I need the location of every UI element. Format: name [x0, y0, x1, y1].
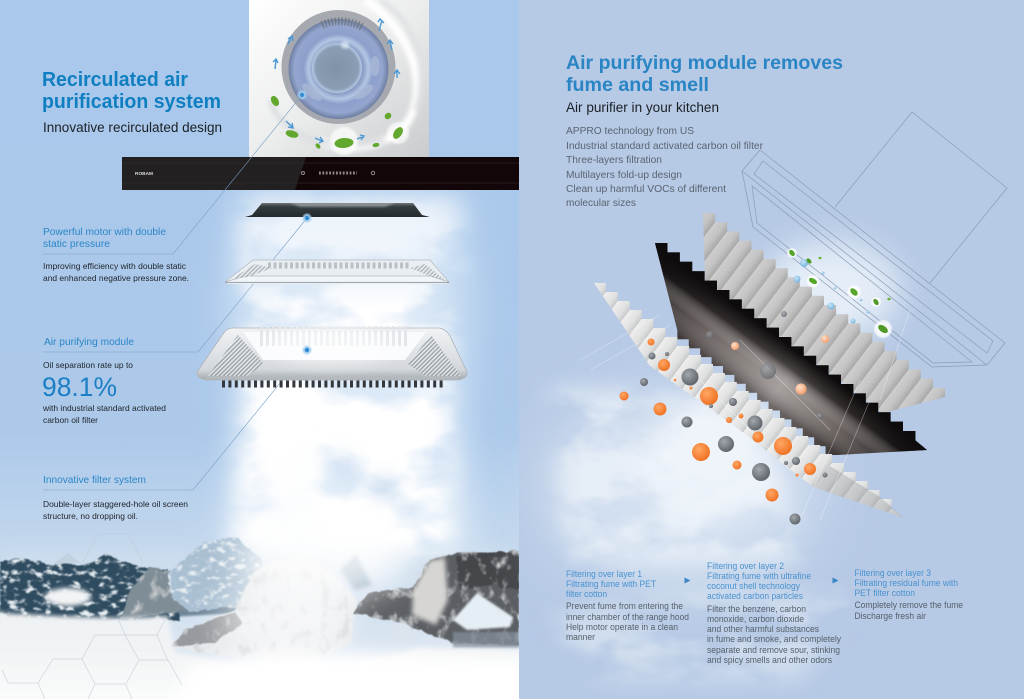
text block: powerful motor — [43, 226, 189, 283]
text block: layer 2: activated carbon particles — [707, 591, 803, 601]
steam column — [215, 190, 480, 562]
marker dot — [302, 213, 312, 223]
glow clouds — [540, 242, 900, 680]
text block: powerful motor: Powerful motor with double — [43, 226, 166, 238]
text block: layer 2: coconut shell technology — [707, 581, 800, 591]
heading — [42, 69, 221, 113]
right rocks — [353, 550, 519, 645]
mountain backdrop — [0, 545, 262, 620]
oil filter screen — [225, 260, 449, 284]
distant peak — [52, 553, 81, 565]
feature list: APPRO technology from US — [566, 125, 694, 137]
text block: layer 2: Filtrating fume with ultrafine — [707, 571, 811, 581]
text block: layer 1: manner — [566, 632, 595, 642]
feature list: Clean up harmful VOCs of different — [566, 183, 726, 195]
text block: air purifying module — [42, 336, 166, 425]
text block: innovative filter: Double-layer staggered-hole oil screen — [43, 499, 188, 509]
text block: innovative filter — [43, 474, 188, 521]
central white mountain — [170, 553, 357, 665]
fan wheel — [282, 10, 396, 124]
cloud sea — [0, 612, 540, 699]
heading: purification system — [42, 91, 221, 113]
motor unit — [245, 203, 430, 223]
fog over tray — [268, 325, 392, 365]
arrow: layer 2 to 3 — [832, 578, 838, 584]
text block: air purifying module: with industrial standard activated — [42, 403, 166, 413]
text block: layer 1 — [566, 569, 689, 642]
hood control bar — [122, 157, 519, 190]
heading: Recirculated air — [42, 69, 188, 91]
text block: layer 1: Filtrating fume with PET — [566, 579, 656, 589]
brand: ROBAM — [135, 171, 153, 176]
text block: powerful motor: Improving efficiency with double static — [43, 261, 187, 271]
text block: layer 3: PET filter cotton — [854, 588, 915, 598]
filter layer 2: carbon layer — [655, 243, 927, 455]
green leaves — [786, 248, 893, 339]
feature list: Three-layers filtration — [566, 154, 662, 166]
text block: layer 2: and other harmful substances — [707, 624, 819, 634]
mountain landscape — [0, 522, 540, 699]
heading — [566, 52, 843, 96]
text block: layer 1: Prevent fume from entering the — [566, 601, 683, 611]
text block: layer 1: filter cotton — [566, 589, 607, 599]
filter layer 3: grey pleats — [703, 213, 945, 413]
heading: Air purifying module removes — [566, 52, 843, 74]
grey rock slab — [120, 568, 190, 620]
hexagon outlines — [2, 534, 182, 699]
text block: innovative filter: Innovative filter system — [43, 474, 146, 486]
orange particles — [620, 335, 829, 502]
airflow arrows — [273, 19, 400, 143]
leader lines — [43, 95, 307, 490]
text block: layer 3: Filtrating residual fume with — [854, 578, 958, 588]
text block: layer 3 — [854, 568, 963, 621]
text block: air purifying module: Oil separation rate up to — [43, 360, 133, 370]
text block: layer 2: Filter the benzene, carbon — [707, 604, 806, 614]
text block: layer 3: Filtering over layer 3 — [854, 568, 931, 578]
panel: left recirculated system — [0, 0, 540, 699]
text block: powerful motor: and enhanced negative pressure zone. — [43, 273, 189, 283]
text block: layer 1: inner chamber of the range hood — [566, 612, 689, 622]
feature list: Multilayers fold-up design — [566, 169, 682, 181]
text block: layer 2: in fume and smoke, and completely — [707, 634, 841, 644]
touch controls — [302, 171, 375, 175]
text block: layer 1: Filtering over layer 1 — [566, 569, 642, 579]
text block: layer 1: Help motor operate in a clean — [566, 622, 678, 632]
steam over peaks — [235, 522, 405, 598]
feature list: molecular sizes — [566, 197, 636, 209]
large purifying tray — [197, 325, 467, 384]
leaves — [269, 94, 409, 155]
text block: layer 3: Discharge fresh air — [854, 611, 926, 621]
text block: layer 2: and spicy smells and other odors — [707, 655, 832, 665]
feature list — [566, 125, 763, 209]
range hood fan visual — [249, 0, 429, 157]
text block: layer 2: Filtering over layer 2 — [707, 561, 784, 571]
snowy peak — [168, 537, 262, 612]
filter layer 1: white pleats — [594, 283, 904, 518]
light streaks — [580, 310, 910, 520]
clean air bubbles — [794, 259, 870, 324]
hood line art — [742, 112, 1007, 367]
text block: layer 2 — [707, 561, 841, 665]
subheading: Air purifier in your kitchen — [566, 100, 719, 115]
marker dot: motor — [297, 90, 307, 100]
text block: air purifying module: 98.1% — [42, 372, 117, 402]
text block: layer 2: separate and remove sour, stinking — [707, 645, 840, 655]
text block: powerful motor: static pressure — [43, 238, 110, 250]
grey particles — [640, 311, 828, 524]
text block: innovative filter: structure, no dropping oil. — [43, 511, 138, 521]
air swirl — [270, 0, 421, 147]
text block: air purifying module: Air purifying module — [44, 336, 134, 348]
left ridge — [0, 553, 180, 622]
heading: fume and smell — [566, 74, 709, 96]
text block: layer 3: Completely remove the fume — [854, 600, 963, 610]
marker dot — [302, 345, 312, 355]
feature list: Industrial standard activated carbon oil filter — [566, 140, 763, 152]
text block: layer 2: monoxide, carbon dioxide — [707, 614, 804, 624]
text block: air purifying module: carbon oil filter — [43, 415, 98, 425]
arrow: layer 1 to 2 — [684, 578, 690, 584]
subheading: Innovative recirculated design — [43, 120, 222, 135]
panel: right air purifying module — [519, 0, 1024, 699]
